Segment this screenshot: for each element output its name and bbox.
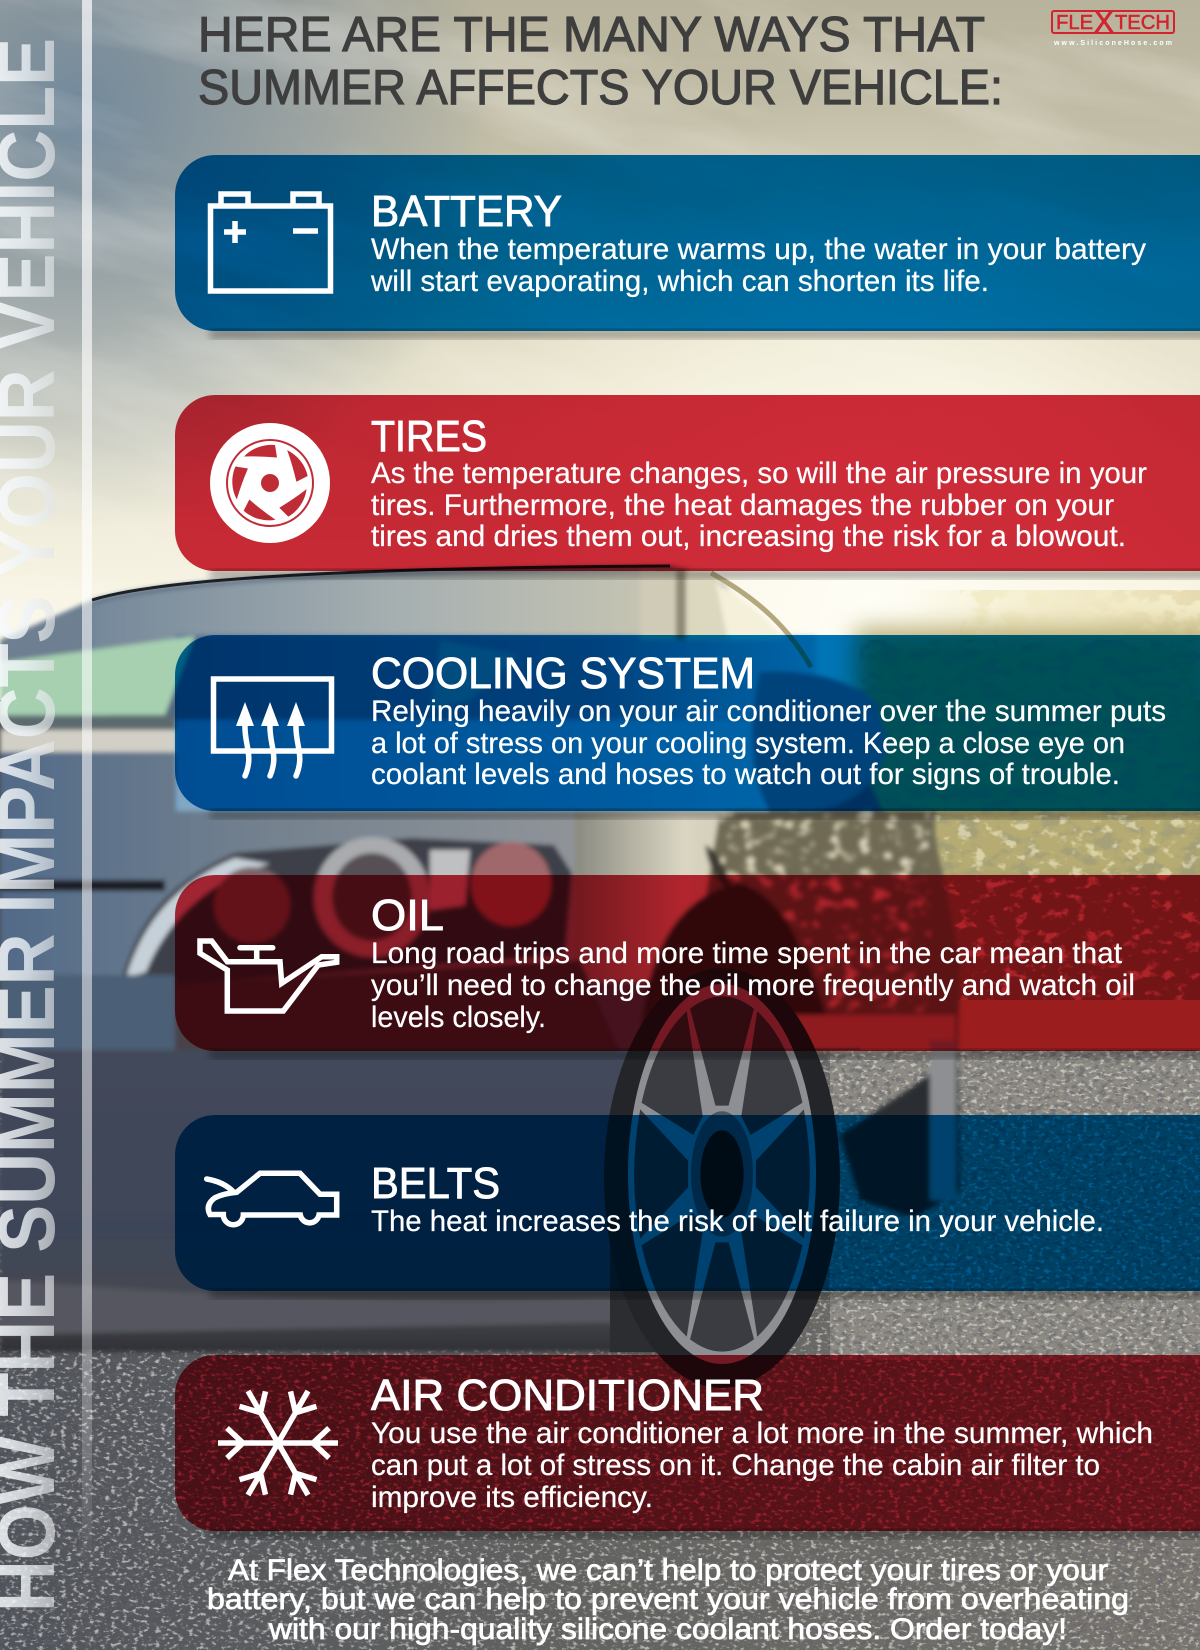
cooling system text: a lot of stress on your cooling system. Keep a close eye on — [371, 727, 1125, 760]
oil text — [371, 937, 1135, 1034]
hood and door — [0, 752, 640, 982]
cooling system text: Relying heavily on your air conditioner over the summer puts — [371, 695, 1166, 728]
closing statement: with our high-quality silicone coolant hoses. Order today! — [268, 1613, 1067, 1646]
logo: Flextech: TECH — [1115, 12, 1170, 34]
cooling system text — [371, 695, 1166, 791]
panel: cooling system — [175, 635, 1200, 819]
icon: battery — [210, 194, 330, 291]
closing statement: At Flex Technologies, we can’t help to protect your tires or your — [228, 1554, 1108, 1587]
panel: battery — [175, 155, 1200, 339]
tires text — [371, 457, 1147, 553]
treetops — [900, 590, 1200, 645]
belts heading: BELTS — [371, 1159, 500, 1208]
tires text: As the temperature changes, so will the air pressure in your — [371, 457, 1147, 490]
oil text: Long road trips and more time spent in the car mean that — [371, 937, 1123, 970]
icon: snowflake — [218, 1384, 338, 1502]
car — [0, 566, 960, 1352]
wheel — [604, 968, 840, 1388]
tires text: tires. Furthermore, the heat damages the rubber on your — [371, 489, 1114, 522]
tires text: tires and dries them out, increasing the risk for a blowout. — [371, 520, 1126, 553]
tires heading: TIRES — [371, 412, 487, 461]
icon: tire — [210, 423, 330, 543]
panel: air conditioner — [175, 1355, 1200, 1539]
closing statement: battery, but we can help to prevent your vehicle from overheating — [207, 1583, 1129, 1616]
panel: tires — [175, 395, 1200, 579]
cooling system heading: COOLING SYSTEM — [371, 649, 755, 698]
heading — [198, 8, 1003, 115]
heading: HERE ARE THE MANY WAYS THAT — [198, 8, 985, 62]
ground — [0, 1050, 1200, 1650]
headlight — [120, 837, 620, 1052]
logo: Flextech — [1052, 4, 1174, 47]
panel: belts — [175, 1115, 1200, 1299]
air conditioner text: You use the air conditioner a lot more in the summer, which — [371, 1417, 1153, 1450]
logo: Flextech: X — [1093, 4, 1115, 40]
air conditioner text — [371, 1417, 1153, 1514]
oil text: levels closely. — [371, 1001, 546, 1034]
vertical divider bar — [82, 0, 92, 1650]
battery heading: BATTERY — [371, 187, 562, 236]
battery text — [370, 233, 1146, 298]
heading: SUMMER AFFECTS YOUR VEHICLE: — [198, 61, 1003, 115]
battery text: will start evaporating, which can shorten its life. — [370, 265, 989, 298]
oil heading: OIL — [371, 891, 444, 940]
belts text: The heat increases the risk of belt failure in your vehicle. — [371, 1205, 1104, 1238]
icon: oil can — [200, 941, 337, 1011]
air conditioner text: improve its efficiency. — [371, 1481, 653, 1514]
icon: defrost — [214, 679, 332, 776]
door sill and rear tyre — [840, 1050, 960, 1218]
icon: car outline — [207, 1173, 337, 1225]
logo: Flextech: www.SiliconeHose.com — [1053, 40, 1172, 47]
panel: oil — [175, 875, 1200, 1059]
logo: Flextech: FLE — [1056, 12, 1093, 34]
battery text: When the temperature warms up, the water in your battery — [371, 233, 1146, 266]
lower car — [0, 975, 175, 1050]
oil text: you’ll need to change the oil more frequently and watch oil — [371, 969, 1135, 1002]
trees — [855, 628, 1200, 890]
closing statement — [207, 1554, 1129, 1646]
cooling system text: coolant levels and hoses to watch out for signs of trouble. — [371, 758, 1120, 791]
air conditioner text: can put a lot of stress on it. Change the cabin air filter to — [371, 1449, 1100, 1482]
air conditioner heading: AIR CONDITIONER — [371, 1371, 764, 1420]
